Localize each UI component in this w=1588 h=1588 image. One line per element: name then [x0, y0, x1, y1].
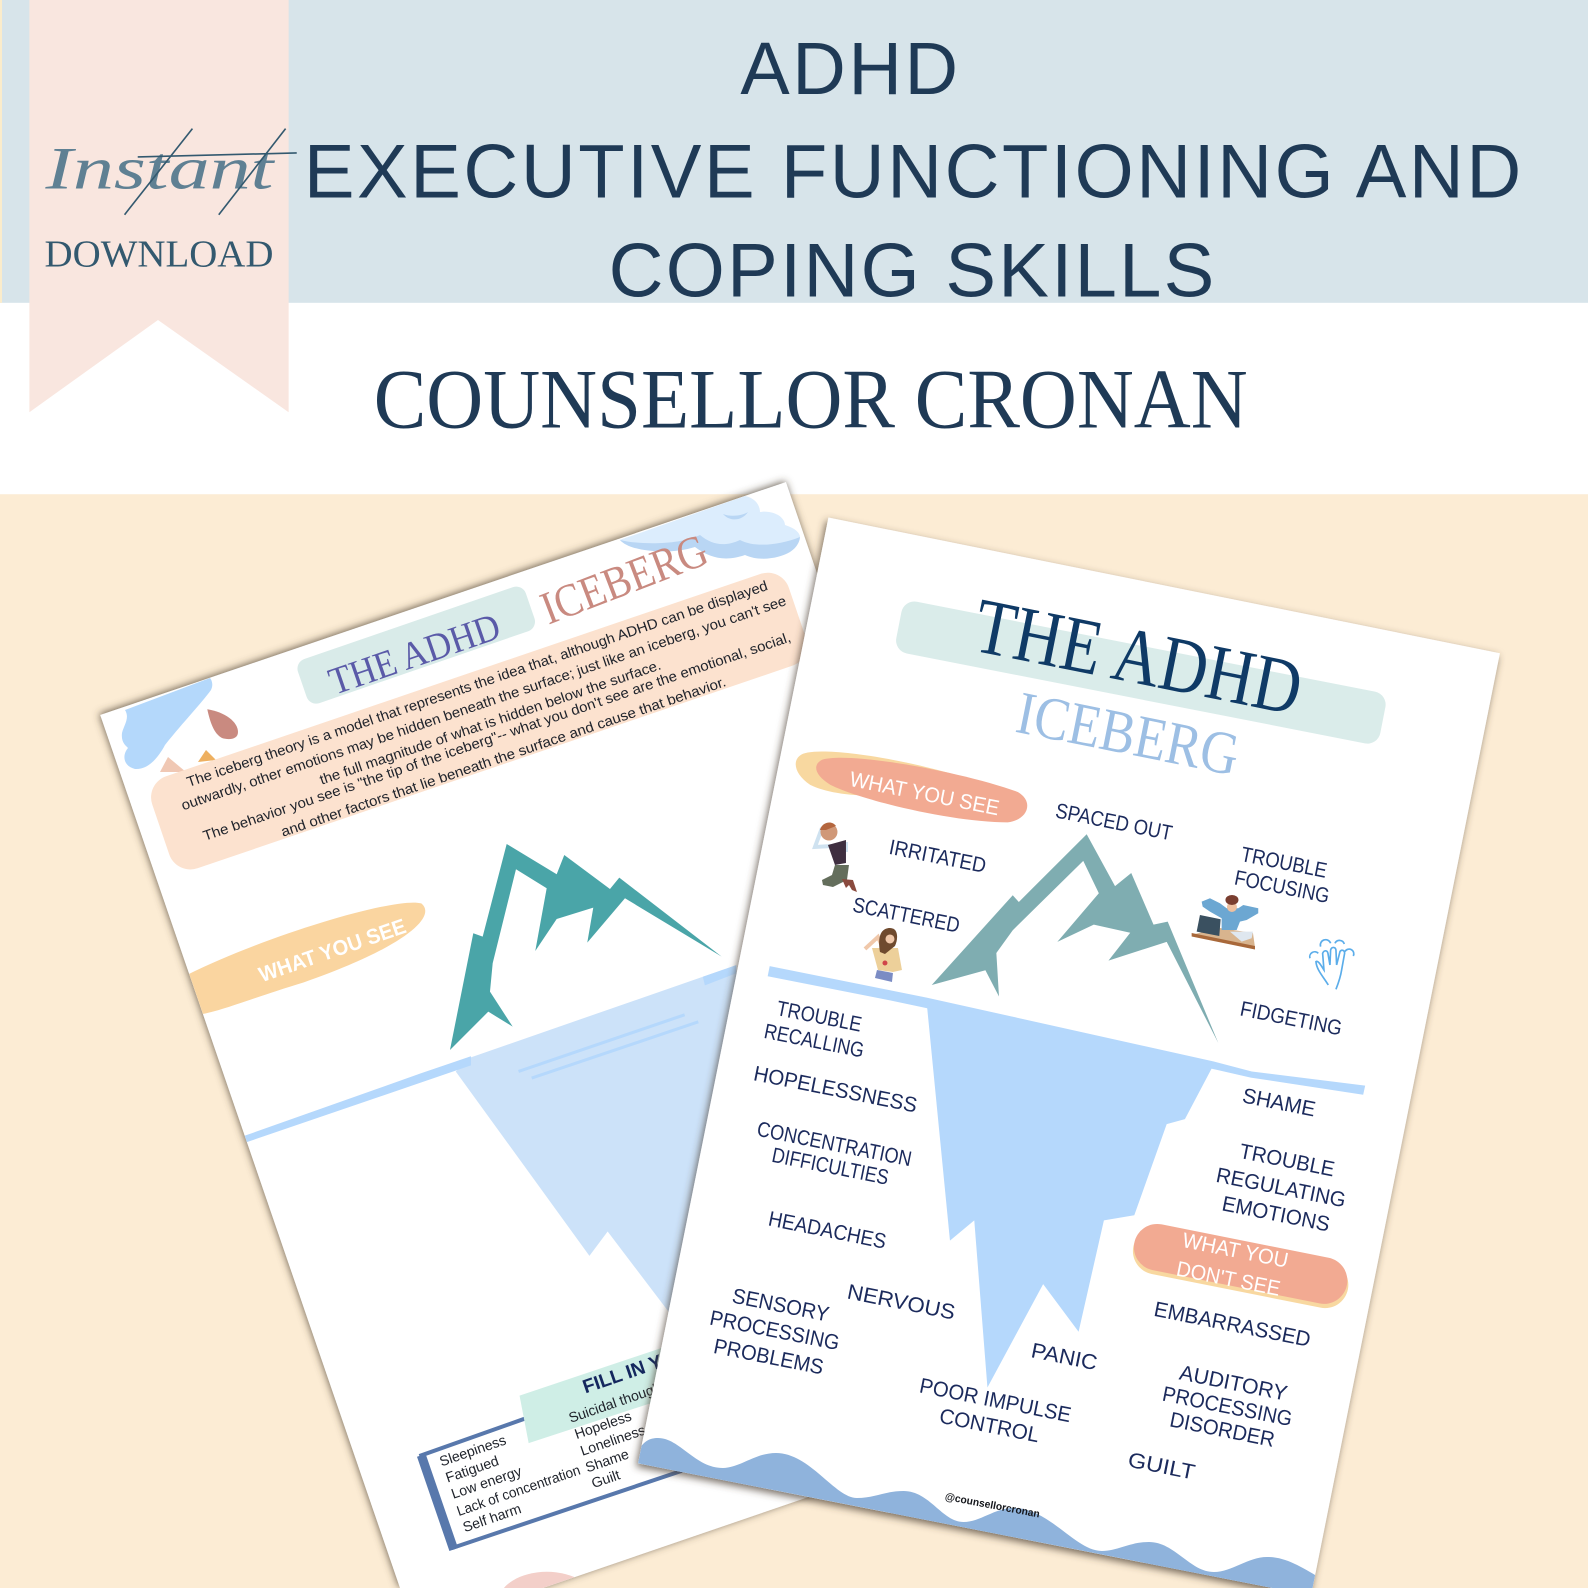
labels: below the surface, centre: POOR IMPULSE	[918, 1373, 1073, 1427]
what you see label: WHAT YOU SEE	[848, 767, 1001, 820]
labels: below the surface, right: TROUBLE	[1238, 1139, 1337, 1181]
labels: below the surface, left: HEADACHES	[766, 1207, 888, 1254]
list column two: Loneliness	[578, 1423, 648, 1460]
labels: below the surface, left: PROBLEMS	[712, 1334, 826, 1379]
what you don't see label: DON'T SEE	[1174, 1257, 1282, 1301]
labels: below the surface, centre: CONTROL	[937, 1404, 1042, 1447]
ribbon: instant download	[29, 0, 297, 412]
labels: below the surface, right: SHAME	[1240, 1084, 1318, 1122]
list column two: Guilt	[590, 1467, 622, 1492]
script word: Instant	[44, 129, 297, 215]
word: DOWNLOAD: DOWNLOAD	[45, 233, 273, 275]
labels: below the surface, left: NERVOUS	[845, 1280, 957, 1325]
icon: small drops	[160, 750, 216, 772]
page background: cream lower area	[0, 494, 1588, 1588]
labels: below the surface, left: RECALLING	[762, 1019, 866, 1062]
wave footer	[637, 1438, 1320, 1588]
labels: below the surface, left: CONCENTRATION	[755, 1117, 914, 1171]
list column one: Lack of concentration	[455, 1463, 583, 1520]
author name: COUNSELLOR CRONAN	[374, 352, 1248, 446]
figure: man at desk	[1192, 895, 1258, 949]
list column one: Self harm	[461, 1501, 523, 1536]
list column one	[440, 1438, 580, 1532]
figure: irritated man	[815, 822, 857, 892]
what you see label	[796, 751, 1027, 822]
panel: left worksheet page	[94, 476, 818, 1588]
intro text box: The iceberg theory is a model that represents the idea that, although ADHD can be displayed	[185, 578, 770, 791]
labels: below the surface, centre: PANIC	[1029, 1338, 1099, 1375]
intro text box: The behavior you see is "the tip of the iceberg"-- what you don't see are the emotional, social,	[201, 630, 793, 845]
iceberg tip	[450, 844, 722, 1050]
labels: below the surface, left	[708, 996, 957, 1379]
labels: what you see side: IRRITATED	[887, 835, 988, 878]
intro text box: the full magnitude of what is hidden below the surface.	[318, 658, 663, 789]
labels: below the surface, centre	[918, 1338, 1099, 1447]
heading: THE ADHD: THE ADHD	[324, 606, 506, 703]
list column one: Sleepiness	[438, 1433, 508, 1470]
icon: rain drop	[207, 709, 238, 739]
title: COPING SKILLS	[609, 229, 1214, 314]
labels: what you see side: SPACED OUT	[1053, 799, 1174, 845]
heading band	[894, 599, 1388, 746]
panel: right iceberg page	[637, 518, 1500, 1588]
header band	[0, 0, 1588, 303]
what you don't see label	[1129, 1220, 1352, 1312]
water line	[768, 966, 1365, 1095]
intro text box	[145, 567, 813, 875]
what you see label: WHAT YOU SEE	[256, 914, 409, 987]
icon: fidgeting hand	[1310, 940, 1354, 989]
intro text box: outwardly, other emotions may be hidden beneath the surface; just like an iceberg, you can't see	[179, 593, 789, 814]
what you don't see label: WHAT YOU	[1180, 1228, 1290, 1273]
iceberg tip	[932, 834, 1218, 1043]
title: ADHD	[740, 27, 958, 110]
heading: THE ADHD: THE ADHD	[967, 582, 1309, 733]
heading band	[295, 584, 538, 706]
heading: fill in: FILL IN Y	[580, 1351, 665, 1398]
labels: below the surface, right: AUDITORY	[1177, 1361, 1289, 1406]
labels: below the surface, right: EMBARRASSED	[1152, 1297, 1313, 1352]
heading: ICEBERG: ICEBERG	[534, 524, 715, 635]
pink blob	[504, 1572, 574, 1588]
labels: below the surface, right: EMOTIONS	[1220, 1191, 1332, 1236]
labels: below the surface, right: PROCESSING	[1160, 1382, 1294, 1431]
intro text box: and other factors that lie beneath the surface and cause that behavior.	[279, 674, 728, 841]
labels: below the surface, left: SENSORY	[730, 1284, 831, 1326]
labels: below the surface, right: DISORDER	[1168, 1407, 1277, 1452]
icon: left cloud	[122, 678, 212, 769]
labels: what you see side: FIDGETING	[1238, 997, 1344, 1040]
labels: below the surface, left: PROCESSING	[708, 1306, 842, 1355]
icon: top right cloud	[620, 496, 800, 559]
labels: what you see side: FOCUSING	[1232, 866, 1332, 908]
list column two: Hopeless	[573, 1409, 634, 1443]
labels: what you see side: TROUBLE	[1239, 842, 1329, 883]
labels: what you see side: SCATTERED	[851, 893, 962, 938]
water marks	[519, 1015, 698, 1078]
list column two	[569, 1384, 654, 1487]
list column one: Low energy	[449, 1463, 525, 1503]
handle text: @counsellorcronan	[944, 1491, 1041, 1520]
list column two: Suicidal thoughts	[567, 1376, 674, 1427]
iceberg underwater	[456, 965, 749, 1317]
labels: below the surface, left: HOPELESSNESS	[752, 1061, 919, 1117]
labels: below the surface, right: GUILT	[1126, 1448, 1197, 1485]
labels: below the surface, left: TROUBLE	[775, 996, 864, 1037]
labels: below the surface, left: DIFFICULTIES	[770, 1143, 891, 1190]
title: EXECUTIVE FUNCTIONING AND	[304, 129, 1521, 214]
what you see label	[188, 903, 425, 1015]
water line	[243, 965, 736, 1143]
labels: below the surface, right: REGULATING	[1214, 1163, 1348, 1212]
list column one: Fatigued	[444, 1453, 501, 1486]
list column two: Shame	[583, 1447, 631, 1476]
labels: below the surface, right	[1126, 1084, 1348, 1485]
script word: Instant: Instant	[44, 135, 276, 202]
iceberg underwater	[927, 1003, 1213, 1387]
heading: ICEBERG: ICEBERG	[1011, 679, 1245, 789]
figure: scattered woman	[865, 928, 902, 982]
panel: fill in list	[421, 1339, 705, 1550]
labels: what you see side	[851, 799, 1344, 1040]
title	[304, 27, 1521, 314]
